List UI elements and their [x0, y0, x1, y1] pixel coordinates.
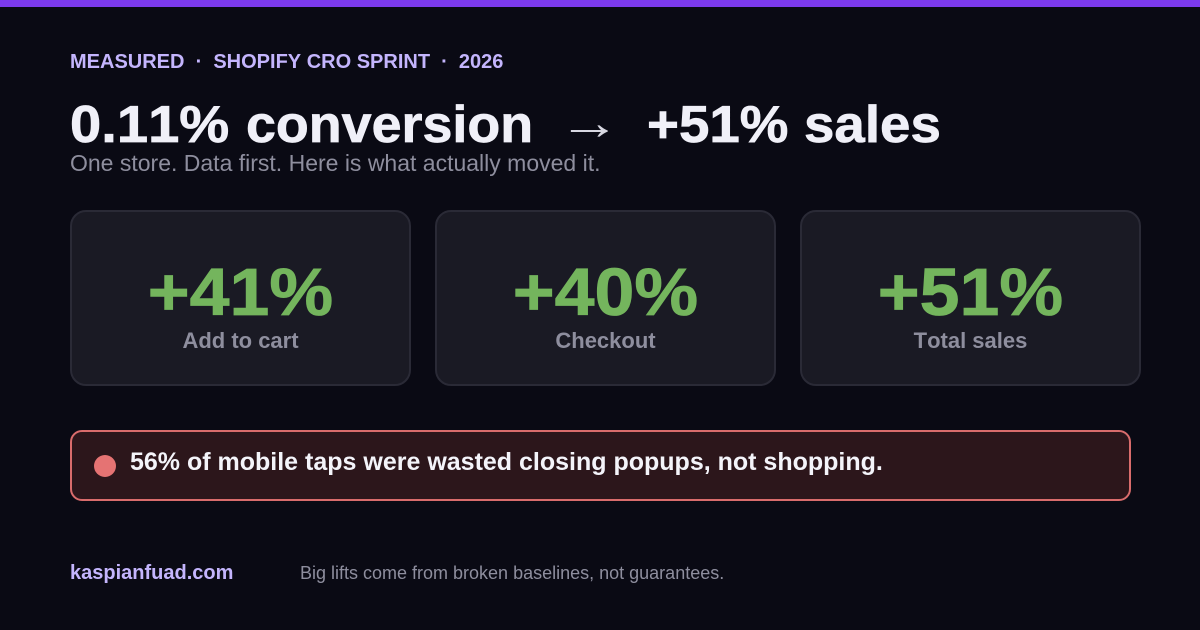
footer disclaimer: Big lifts come from broken baselines, not guarantees. — [300, 563, 724, 583]
subtitle: One store. Data first. Here is what actually moved it. — [70, 150, 600, 176]
title: conversion — [246, 96, 533, 154]
title — [70, 96, 941, 154]
title: sales — [804, 96, 941, 154]
title: → — [558, 97, 620, 150]
metric label: Checkout — [555, 328, 656, 353]
panel: total sales metric — [800, 210, 1141, 386]
metric value: +41% — [148, 255, 333, 330]
metric value: +51% — [878, 255, 1063, 330]
panel: add to cart metric — [70, 210, 411, 386]
metric value: +40% — [513, 255, 698, 330]
icon: red dot — [94, 455, 116, 477]
metric label: Total sales — [914, 328, 1027, 353]
metric label: Add to cart — [182, 328, 299, 353]
footer brand: kaspianfuad.com — [70, 562, 233, 584]
title: 0.11% — [70, 96, 229, 154]
top accent bar — [0, 0, 1200, 7]
callout text: 56% of mobile taps were wasted closing popups, not shopping. — [130, 448, 883, 476]
title: +51% — [647, 96, 788, 154]
eyebrow label: MEASURED · SHOPIFY CRO SPRINT · 2026 — [70, 51, 503, 73]
callout: mobile taps — [70, 430, 1131, 501]
panel: checkout metric — [435, 210, 776, 386]
